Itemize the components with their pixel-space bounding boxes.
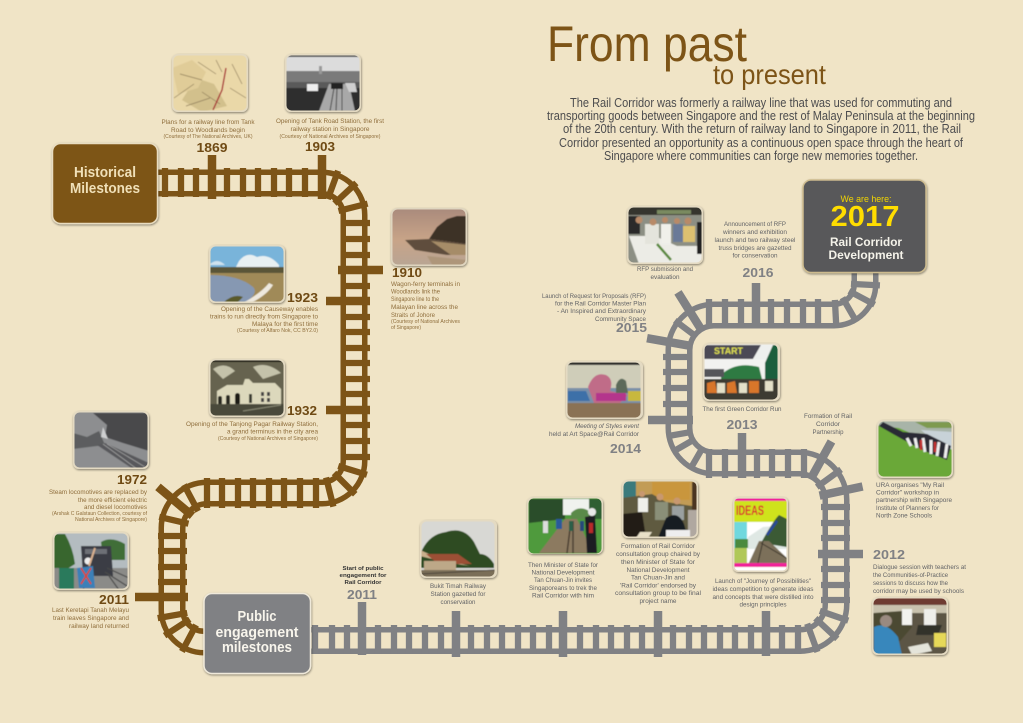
caption: Corridor" workshop in [876,490,939,496]
year: 1903 [305,139,335,154]
milestone 1972 [49,411,149,523]
caption: trains to run directly from Singapore to [210,314,318,320]
year: 2015 [616,320,647,335]
caption: Malayan line across the [391,304,458,311]
caption: of Singapore) [391,325,421,331]
caption: Community Space [595,316,646,323]
milestone 2016 [714,221,796,280]
caption [49,489,148,523]
caption: Start of public [342,566,384,572]
caption: evaluation [650,274,680,281]
caption: launch and two railway steel [714,237,796,244]
intro paragraph: of the 20th century. With the return of railway land to Singapore in 2011, the Rail [563,122,961,136]
caption: Opening of Tank Road Station, the first [276,118,384,125]
intro paragraph [547,96,975,163]
panel: Historical Milestones box: Historical [74,164,136,181]
caption: Formation of Rail Corridor Partnership: Partnership [812,429,844,436]
milestone 2012: dialogue session [872,547,966,655]
milestone: Journey of Possibilities [712,497,814,608]
caption: (Courtesy of National Archives [391,319,460,325]
year: 2014 [610,441,642,456]
caption: National Development [626,567,690,574]
panel: 2017 Rail Corridor Development box [803,180,926,272]
caption: Malaya for the first time [252,321,318,328]
caption: Tan Chuan-Jin invites [534,577,593,584]
caption [210,306,319,334]
caption: (Arshak C Galstaun Collection, courtesy of [52,511,148,517]
milestone 1910 [391,208,467,331]
year: 1910 [392,265,422,280]
caption [714,221,796,260]
caption [430,583,487,606]
grey railway track [300,265,880,657]
photo: railway map [172,54,248,112]
milestone 1903 [276,54,384,154]
caption: corridor may be used by schools [873,588,965,595]
caption: ideas competition to generate ideas [712,586,814,593]
year: 1932 [287,403,317,418]
photo: IDEAS poster: IDEAS [736,502,764,518]
photo: last KTM train [53,532,129,590]
photo: Tanjong Pagar Railway Station [209,359,285,417]
caption [712,578,814,608]
caption [391,281,460,331]
year: 2013 [726,417,758,432]
caption [637,266,693,281]
caption: Formation of Rail Corridor [621,543,696,550]
caption: winners and exhibition [722,229,787,236]
caption: 'Rail Corridor' endorsed by [620,582,697,590]
intro paragraph: Corridor presented an opportunity as a continuous open space through the heart of [559,136,963,150]
brown railway track [135,155,383,651]
caption: Launch of "Journey of Possibilities" [715,578,812,585]
title: to present [713,59,826,90]
year: 1923 [287,290,318,305]
milestone 2011 grey: start of public engagement [340,566,387,602]
intro paragraph: Singapore where communities can forge new memories together. [604,149,918,163]
panel: 2017 Rail Corridor Development box: Development [828,248,904,262]
caption: The first Green Corridor Run [702,406,782,413]
milestone: My Rail Corridor workshop [876,420,953,520]
caption: the more efficient electric [78,497,148,504]
caption: Road to Woodlands begin [171,127,245,134]
caption: Formation of Rail Corridor Partnership: Corridor [816,421,841,428]
photo: Bukit Timah station [420,520,497,578]
year: 2012 [873,547,905,562]
caption: Singapore line to the [391,296,439,303]
caption: Singaporeans to trek the [529,585,597,592]
caption: Meeting of Styles event [575,423,640,430]
panel: Public engagement milestones box: milestones [222,639,292,656]
caption [542,293,647,323]
caption: then Minister of State for [621,559,696,566]
caption: Straits of Johore [391,312,435,319]
photo: Meeting of Styles graffiti [566,361,643,419]
panel: Historical Milestones box [52,144,158,224]
photo: Tank Road Station [285,54,361,112]
year: 2011 [99,592,129,607]
milestone 1869 [162,54,255,155]
milestone: trek the Rail Corridor [527,497,603,600]
photo: Causeway [209,245,285,303]
caption: North Zone Schools [876,512,933,520]
caption [549,423,640,438]
caption: Formation of Rail Corridor Partnership [804,413,852,436]
caption: design principles [740,602,787,608]
caption: Opening of the Tanjong Pagar Railway Station, [186,421,318,428]
caption: National Development [532,570,595,576]
caption: Tan Chuan-Jin and [631,574,685,582]
caption: truss bridges are gazetted [718,245,792,252]
caption: consultation group to be final [615,590,701,597]
milestone 2013 [702,343,782,432]
milestone 2014 [549,361,643,456]
caption: held at Art Space@Rail Corridor [549,431,640,438]
photo: Woodlands wagon-ferry terminal [391,208,467,266]
caption: conservation [440,599,476,606]
caption: consultation group chaired by [616,551,701,558]
caption: National Archives of Singapore) [75,517,147,523]
caption: (Courtesy of The National Archives, UK) [164,134,253,140]
caption: (Courtesy of National Archives of Singapore) [280,134,381,140]
caption [276,118,384,140]
caption: partnership with Singapore [876,497,952,504]
caption: and diesel locomotives [84,504,148,511]
caption [873,564,966,595]
photo: RFP evaluation [627,206,703,264]
caption: project name [640,598,677,605]
caption: Opening of the Causeway enables [221,306,319,313]
caption: Plans for a railway line from Tank [162,119,255,126]
caption: Steam locomotives are replaced by [49,489,148,496]
photo: people on the trek [527,497,603,555]
panel: Public engagement milestones box: Public [238,608,276,625]
photo: dialogue session [872,597,948,655]
caption [340,566,387,586]
caption: Woodlands link the [391,288,440,296]
panel: Public engagement milestones box: engagement [216,624,298,641]
title [547,16,826,90]
caption [162,119,255,140]
year: 2016 [742,265,774,280]
year: 1869 [196,140,228,155]
caption: Launch of Request for Proposals (RFP) [542,293,646,300]
title: From past [547,16,747,72]
caption: engagement for [340,573,387,579]
photo: steam locomotive [73,411,149,469]
caption: Announcement of RFP [724,221,786,228]
caption [52,607,129,630]
milestone 1923 [209,245,319,334]
panel: 2017 Rail Corridor Development box: 2017 [830,201,900,233]
panel: Historical Milestones box: Milestones [70,180,140,197]
photo: students on the corridor [877,420,953,478]
panel: 2017 Rail Corridor Development box: Rail Corridor [830,235,902,249]
year: 2011 [347,587,377,602]
intro paragraph: The Rail Corridor was formerly a railway line that was used for commuting and [570,96,952,110]
photo: consultation meeting [622,480,698,538]
caption: URA organises "My Rail [876,482,944,489]
caption: for the Rail Corridor Master Plan [555,300,646,308]
caption: (Courtesy of National Archives of Singapore) [218,436,318,442]
caption: sessions to discuss how the [873,580,948,587]
caption [615,543,701,605]
caption: Station gazetted for [430,591,486,598]
photo: Green Corridor Run: START [714,346,743,356]
caption: Bukit Timah Railway [430,583,487,590]
caption: - An Inspired and Extraordinary [557,308,647,315]
panel: Public engagement milestones box [204,594,310,674]
milestone 2011 brown [52,532,129,630]
milestone 2015 [542,293,647,335]
caption: Institute of Planners for [876,505,940,512]
caption: Rail Corridor [344,580,382,586]
caption: RFP submission and [637,266,693,273]
caption: Dialogue session with teachers at [873,564,966,571]
milestone: formation of consultation group [615,480,701,605]
caption: the Communities-of-Practice [873,572,948,579]
caption: train leaves Singapore and [53,615,129,622]
caption: Rail Corridor with him [532,592,594,600]
caption [186,421,318,442]
intro paragraph: transporting goods between Singapore and the rest of Malay Peninsula at the beginning [547,109,975,123]
panel: 2017 Rail Corridor Development box: We are here: [840,194,892,205]
caption: railway land returned [69,623,129,630]
caption [876,482,952,520]
caption: and concepts that were distilled into [712,594,814,601]
caption: for conservation [732,252,778,260]
caption: Wagon-ferry terminals in [391,281,460,288]
caption: Formation of Rail Corridor Partnership: Formation of Rail [804,413,852,420]
year: 1972 [117,472,147,487]
caption: railway station in Singapore [290,126,370,133]
caption [528,562,599,600]
caption: (Courtesy of Alfaro Nok, CC BY2.0) [237,328,318,334]
milestone 1932 [186,359,318,442]
caption: a grand terminus in the city area [227,428,318,436]
caption: Last Keretapi Tanah Melayu [52,607,129,614]
caption: Then Minister of State for [528,562,599,569]
milestone: RFP submission [627,206,703,281]
milestone: Bukit Timah Railway Station [420,520,497,606]
